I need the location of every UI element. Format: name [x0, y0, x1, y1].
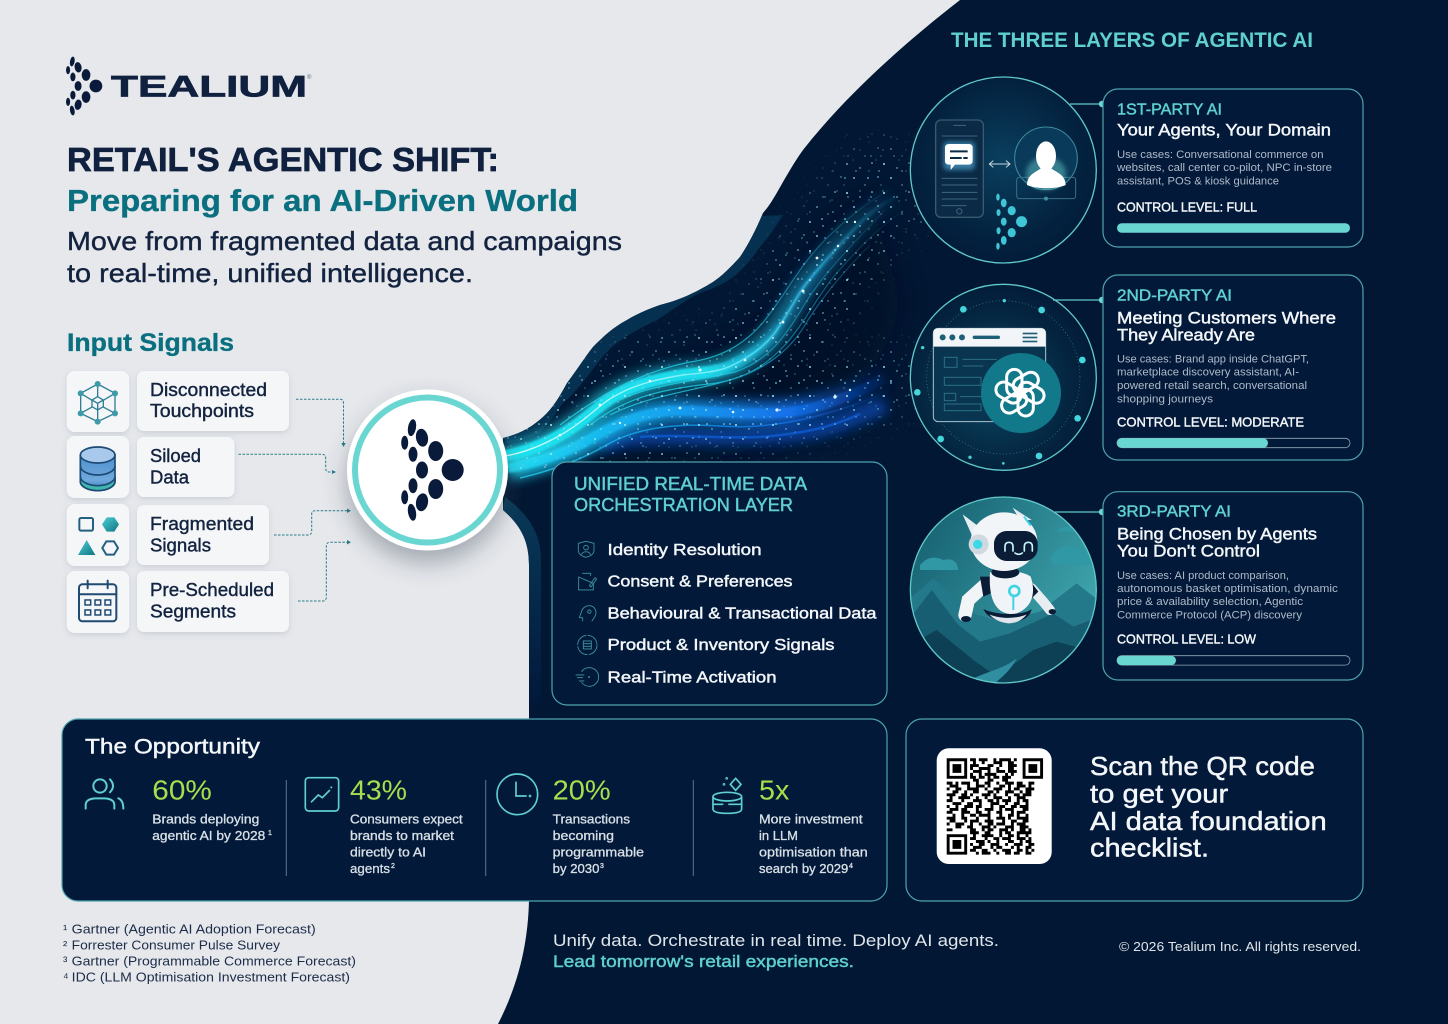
stat: 60%: agentic AI by 2028 [152, 828, 265, 843]
copyright: © 2026 Tealium Inc. All rights reserved. [1119, 939, 1361, 954]
card: 3rd-party AI: CONTROL LEVEL: LOW [1117, 631, 1257, 646]
footnotes [63, 921, 356, 985]
icon: activation [576, 668, 599, 686]
stat: 43%: brands to market [350, 828, 454, 843]
use cases: price & availability selection, Agentic [1117, 596, 1304, 608]
registered mark: ® [307, 74, 312, 81]
icon: behaviour [579, 606, 596, 621]
footnotes: Gartner (Programmable Commerce Forecast) [72, 954, 356, 969]
use cases: powered retail search, conversational [1117, 380, 1307, 392]
stat: 43% [350, 774, 463, 876]
use cases: Commerce Protocol (ACP) discovery [1117, 609, 1303, 621]
QR message: Scan the QR code [1090, 751, 1315, 781]
closing statement: Lead tomorrow's retail experiences. [553, 952, 854, 971]
subtitle: Preparing for an AI-Driven World [67, 183, 578, 218]
card: 2nd-party AI: Meeting Customers Where [1117, 308, 1336, 327]
card: 2nd-party AI: CONTROL LEVEL: MODERATE [1117, 415, 1304, 430]
use cases: shopping journeys [1117, 393, 1214, 405]
background: dark wave [498, 0, 1448, 1024]
list item: Identity Resolution [608, 542, 762, 559]
QR message: to get your [1090, 779, 1229, 809]
stat: 43%: 43% [350, 774, 407, 806]
heading: input signals: Input Signals [67, 329, 234, 357]
input signal: fragmented signals: Signals [150, 536, 211, 556]
stat: 60%: Brands deploying [152, 812, 259, 827]
icon: AI assistant knot [981, 353, 1061, 433]
stat: 5x: 4 [849, 863, 853, 870]
stat: 20% [553, 774, 644, 876]
input signal: fragmented signals: Fragmented [150, 514, 254, 534]
stat: 20%: Transactions [553, 812, 631, 827]
icon: clock [497, 774, 538, 815]
icon: shapes [78, 517, 119, 555]
icon: two-way arrow [989, 161, 1010, 167]
arrow: segments to hub [298, 540, 351, 601]
tagline: to real-time, unified intelligence. [67, 258, 473, 288]
use cases: autonomous basket optimisation, dynamic [1117, 583, 1339, 595]
input signal: fragmented signals [67, 504, 269, 566]
robot arms [965, 585, 985, 615]
icon: product [578, 635, 597, 655]
use cases [1117, 570, 1339, 621]
panel heading: ORCHESTRATION LAYER [574, 495, 793, 515]
arrow: touchpoints to hub [296, 399, 346, 447]
icon: calendar [79, 581, 116, 621]
control bar: low [1117, 656, 1350, 665]
icon: trend chart [305, 778, 339, 811]
Tealium logo [66, 56, 312, 116]
stat: 20%: 20% [553, 774, 611, 806]
stat: 5x: 5x [759, 774, 789, 806]
icon: phone [936, 120, 983, 217]
stat: 20%: by 2030 [553, 861, 599, 876]
panel heading [574, 474, 807, 515]
use cases: Use cases: AI product comparison, [1117, 570, 1289, 582]
icon: database sparkle [713, 778, 742, 813]
list item: Consent & Preferences [608, 574, 792, 591]
input signal: disconnected touchpoints [67, 371, 289, 432]
list item: Real-Time Activation [608, 669, 776, 686]
use cases [1116, 149, 1332, 187]
icon: people [86, 779, 123, 809]
icon: customer avatar [1015, 127, 1077, 201]
stat: 60% [152, 774, 272, 843]
icon: browser window [933, 328, 1046, 422]
input signal: pre-scheduled segments: Segments [150, 602, 236, 622]
stat: 5x: optimisation than [759, 845, 868, 860]
QR message [1090, 751, 1327, 863]
tagline [67, 226, 622, 288]
stat: 5x: More investment [759, 812, 863, 827]
icon: database [80, 447, 115, 491]
stat: 60%: 1 [268, 830, 272, 837]
stat: 43%: Consumers expect [350, 812, 463, 827]
use cases: assistant, POS & kiosk guidance [1117, 175, 1279, 187]
panel: QR call to action [906, 719, 1363, 901]
arrow: siloed data to hub [238, 454, 336, 474]
central hub logo [347, 390, 508, 550]
icon: identity [578, 541, 594, 557]
card: 3rd-party AI: You Don't Control [1117, 542, 1260, 561]
footnotes: ¹ [63, 921, 68, 936]
robot head [963, 514, 983, 540]
card: 2nd-party AI [1103, 275, 1363, 460]
stat: 5x [759, 774, 868, 876]
stat: 20%: becoming [553, 828, 614, 843]
QR message: checklist. [1090, 833, 1209, 863]
use cases: marketplace discovery assistant, AI- [1117, 367, 1299, 379]
footnotes: ⁴ [63, 970, 69, 985]
icon: network cube [78, 381, 118, 425]
tagline: Move from fragmented data and campaigns [67, 226, 622, 256]
panel: the opportunity [62, 719, 887, 901]
panel heading: UNIFIED REAL-TIME DATA [574, 474, 807, 494]
layer 2 illustration [910, 284, 1096, 470]
robot body [990, 571, 1033, 614]
card: 1st-party AI [1103, 89, 1363, 247]
connector 3 [1055, 509, 1105, 515]
input signal: pre-scheduled segments [67, 571, 289, 633]
use cases [1117, 354, 1309, 405]
arrow: fragmented signals to hub [274, 508, 351, 535]
input signal: disconnected touchpoints: Disconnected [150, 380, 267, 400]
footnotes: Gartner (Agentic AI Adoption Forecast) [72, 921, 316, 936]
connector 2 [1053, 297, 1105, 303]
footnotes: ² [63, 937, 68, 952]
data stream [490, 130, 930, 478]
footnotes: Forrester Consumer Pulse Survey [72, 937, 281, 952]
use cases: Use cases: Conversational commerce on [1117, 149, 1324, 161]
input signal: disconnected touchpoints: Touchpoints [150, 401, 254, 421]
card: 3rd-party AI: 3RD-PARTY AI [1117, 504, 1231, 521]
card: 2nd-party AI: They Already Are [1117, 325, 1255, 344]
list item: Behavioural & Transactional Data [608, 605, 877, 622]
wordmark: TEALIUM [111, 70, 307, 104]
footnotes: IDC (LLM Optimisation Investment Forecast) [72, 970, 350, 985]
layer 3 illustration: robot [910, 497, 1100, 685]
stat: 60%: 60% [152, 774, 212, 806]
stat: 43%: directly to AI [350, 845, 426, 860]
input signal: pre-scheduled segments: Pre-Scheduled [150, 580, 274, 600]
connector 1 [1070, 101, 1105, 107]
title: RETAIL'S AGENTIC SHIFT: [67, 141, 499, 178]
stat: 5x: search by 2029 [759, 861, 848, 876]
input signal: siloed data: Siloed [150, 446, 201, 466]
footnotes: ³ [63, 954, 68, 969]
input signal: siloed data: Data [150, 468, 190, 488]
control bar: moderate [1117, 438, 1350, 448]
stat: 20%: 3 [600, 863, 604, 870]
layer 1 illustration [910, 77, 1096, 263]
panel heading: The Opportunity [85, 736, 261, 758]
closing statement: Unify data. Orchestrate in real time. Deploy AI agents. [553, 931, 999, 950]
heading: three layers: THE THREE LAYERS OF AGENTIC AI [951, 29, 1313, 52]
QR code [937, 748, 1052, 864]
logo mark [66, 56, 102, 116]
stat: 43%: agents [350, 861, 390, 876]
card: 1st-party AI: Your Agents, Your Domain [1117, 121, 1331, 140]
control bar: full [1117, 223, 1350, 233]
lower wave band [503, 497, 541, 705]
icon: consent [579, 573, 597, 590]
stat: 43%: 2 [391, 863, 395, 870]
card: 1st-party AI: 1ST-PARTY AI [1117, 102, 1222, 119]
closing statement [553, 931, 999, 971]
card: 2nd-party AI: 2ND-PARTY AI [1117, 288, 1232, 305]
use cases: Use cases: Brand app inside ChatGPT, [1117, 354, 1309, 366]
list item: Product & Inventory Signals [608, 637, 834, 654]
input signal: siloed data [67, 436, 234, 498]
stat: 20%: programmable [553, 845, 644, 860]
use cases: websites, call center co-pilot, NPC in-store [1116, 162, 1332, 174]
QR message: AI data foundation [1090, 806, 1327, 836]
wave highlight band [503, 213, 783, 443]
stat: 5x: in LLM [759, 828, 798, 843]
panel: orchestration layer [552, 462, 887, 705]
card: 1st-party AI: CONTROL LEVEL: FULL [1117, 199, 1257, 214]
card: 3rd-party AI: Being Chosen by Agents [1117, 524, 1317, 543]
card: 3rd-party AI [1103, 492, 1363, 680]
icon: small logo [996, 194, 1027, 250]
